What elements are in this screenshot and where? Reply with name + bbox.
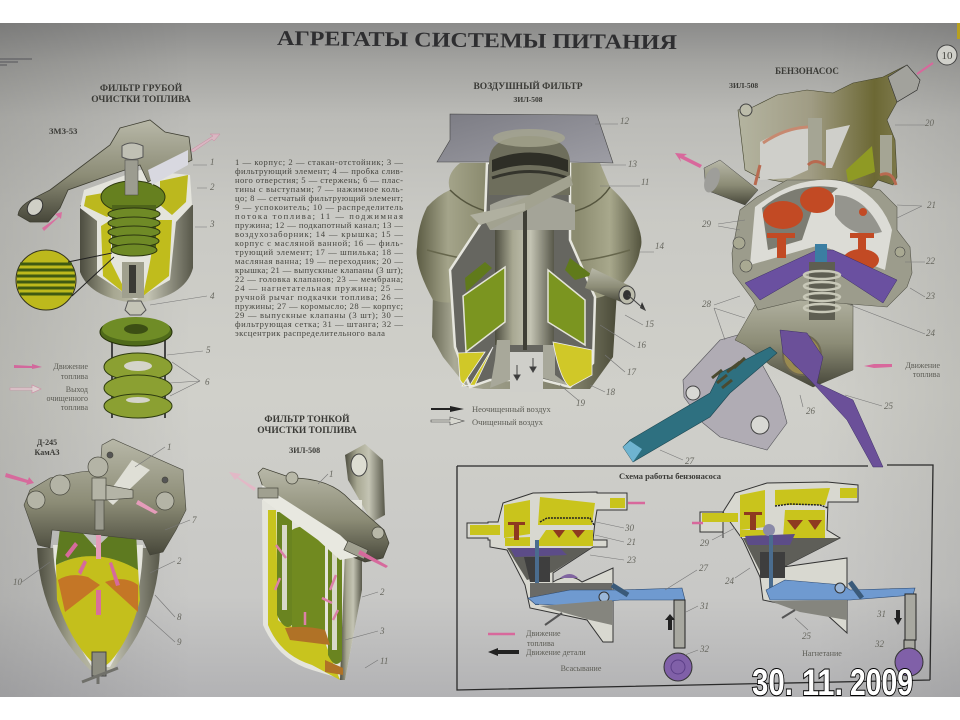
legend: fuel and part motion (488, 629, 586, 657)
part numbers: 4 (210, 291, 215, 301)
scheme part numbers: 24 (725, 576, 734, 586)
screws (733, 237, 905, 272)
part numbers: 20 (925, 118, 934, 128)
publisher imprint (0, 59, 32, 65)
panel: pump operation scheme (457, 465, 933, 690)
scheme part numbers: 30 (624, 523, 634, 533)
part numbers: 28 (702, 299, 712, 309)
parts list text: крышка; 21 — выпускные клапаны (3 шт); (235, 265, 403, 275)
caption: discharge: Нагнетание (802, 649, 842, 658)
part numbers: 12 (620, 116, 630, 126)
part numbers: 23 (926, 291, 936, 301)
parts list text: 1 — корпус; 2 — стакан-отстойник; 3 — (235, 157, 403, 167)
flow arrows (42, 134, 220, 231)
scheme heading: Схема работы бензонасоса (619, 471, 722, 481)
disk stack exploded view (100, 317, 211, 418)
outlet fitting (701, 160, 758, 205)
legend: fuel flow: топлива (913, 370, 940, 379)
legend: fuel flow (10, 362, 88, 412)
drain plug (82, 652, 118, 684)
part numbers (209, 157, 215, 301)
fuel flow arrows (628, 503, 703, 523)
part numbers: 2 (210, 182, 215, 192)
scheme part numbers (624, 523, 886, 654)
model label: Д-245 (37, 438, 57, 447)
bolts and fittings (27, 452, 174, 530)
parts list text: потока топлива; 11 — поджимная (235, 211, 403, 221)
base plate (683, 333, 787, 450)
legend: raw air (431, 404, 552, 414)
red valves (763, 187, 879, 271)
model label ZIL-508: ЗИЛ-508 (289, 446, 320, 455)
parts list text: трующий элемент; 17 — шпилька; 18 — (235, 247, 403, 257)
scheme part numbers: 21 (627, 537, 636, 547)
part numbers: 16 (637, 340, 646, 350)
legend: fuel flow: Движение (905, 361, 940, 370)
heading: air filter: ВОЗДУШНЫЙ ФИЛЬТР (473, 80, 583, 92)
caption: suction: Всасывание (561, 664, 602, 673)
central tube (470, 175, 575, 350)
cover (258, 468, 389, 562)
heading: fuel pump: БЕНЗОНАСОС (775, 66, 839, 76)
outer housing (417, 163, 641, 389)
model label: КамАЗ (35, 448, 59, 457)
panel: air filter (417, 80, 664, 427)
part numbers: 22 (926, 256, 936, 266)
date stamp: 2009 (850, 662, 913, 703)
yellow corner mark (957, 23, 960, 39)
bowl (37, 528, 160, 670)
purple membrane (745, 250, 897, 303)
parts list text: корпус с масляной ванной; 16 — филь- (235, 238, 403, 248)
model label: ЗИЛ-508 (729, 81, 758, 90)
bolt (122, 143, 143, 195)
part numbers: 24 (926, 328, 936, 338)
heading: fine filter: ФИЛЬТР ТОНКОЙ (264, 413, 350, 425)
outlet pipe (585, 268, 635, 304)
heading: coarse filter: ОЧИСТКИ ТОПЛИВА (91, 95, 191, 105)
poster number badge (937, 45, 957, 65)
legend: clean air: Очищенный воздух (472, 417, 544, 427)
parts list text (235, 157, 403, 338)
parts list text: масляная ванна; 19 — переходник; 20 — (235, 256, 403, 266)
model label: ЗИЛ-508 (513, 95, 543, 104)
part numbers: 1 (329, 469, 334, 479)
part numbers: 13 (628, 159, 638, 169)
panel: diesel filter D-245 KamAZ: 2 (177, 556, 182, 566)
air arrows (514, 295, 646, 380)
parts list text: 22 — головка клапанов; 23 — мембрана; (235, 274, 403, 284)
parts list text: 24 — нагнетательная пружина; 25 — (235, 283, 403, 293)
base holes (686, 386, 769, 434)
legend: fuel flow: очищенного (47, 394, 88, 403)
poster number badge: 10 (942, 50, 953, 62)
parts list text: пружины; 27 — коромысло; 28 — корпус; (235, 301, 403, 311)
parts list text: воздухозаборник; 14 — крышка; 15 — (235, 229, 403, 239)
panel: diesel filter D-245 KamAZ: 7 (192, 515, 197, 525)
part numbers (576, 116, 664, 408)
central stem (815, 244, 827, 262)
filter elements (463, 267, 585, 352)
coil spring on lever (783, 335, 821, 375)
panel: diesel filter D-245 KamAZ: 10 (13, 577, 22, 587)
part numbers: 11 (641, 177, 649, 187)
part numbers: 27 (685, 456, 694, 466)
parts list text: фильтрующая сетка; 31 — штанга; 32 — (235, 319, 403, 329)
legend: raw air: Неочищенный воздух (472, 404, 552, 414)
date stamp: 30. (752, 662, 793, 703)
scheme frame (457, 465, 933, 690)
bracket (18, 120, 192, 222)
part numbers: 29 (702, 219, 712, 229)
parts list text: 9 — успокоитель; 10 — распределитель (235, 202, 403, 212)
parts list text: 29 — выпускные клапаны (3 шт); 30 — (235, 310, 403, 320)
legend: clean air (431, 417, 544, 427)
bolts (258, 472, 384, 559)
panel: coarse fuel filter (16, 82, 220, 315)
date stamp (752, 662, 913, 703)
part numbers: 1 (167, 442, 172, 452)
lower body (735, 290, 853, 387)
coil on rocker (712, 358, 745, 388)
panel: fine fuel filter: 2 (380, 587, 385, 597)
parts list text: ручной рычаг подкачки топлива; 26 — (235, 292, 403, 302)
parts list text: эксцентрик распределительного вала (235, 328, 385, 338)
parts list text: фильтрующий элемент; 4 — пробка слив- (235, 166, 403, 176)
heading: coarse filter: ФИЛЬТР ГРУБОЙ (100, 82, 183, 94)
pump valve body (732, 180, 912, 310)
scheme part numbers: 27 (699, 563, 708, 573)
legend: fuel and part motion: Движение (526, 629, 561, 638)
intake plate (437, 114, 613, 163)
part numbers: 18 (606, 387, 616, 397)
part numbers: 17 (627, 367, 636, 377)
open bottom gap (510, 352, 543, 392)
part numbers: 3 (209, 219, 215, 229)
heading: fine filter: ОЧИСТКИ ТОПЛИВА (257, 426, 357, 436)
legend: fuel flow: Движение (53, 362, 88, 371)
mounting head (24, 439, 186, 555)
part numbers: 26 (806, 406, 816, 416)
flow arrows (675, 63, 933, 168)
parts list text: цо; 8 — сетчатый фильтрующий элемент; (235, 193, 403, 203)
filter cup (262, 500, 362, 680)
mounting lug (345, 444, 385, 522)
scheme part numbers: 25 (802, 631, 812, 641)
panel: fine fuel filter: 3 (379, 626, 385, 636)
throat (489, 129, 570, 195)
part numbers: 19 (576, 398, 586, 408)
parts list text: ного отверстия; 5 — стержень; 6 — плас- (235, 175, 403, 185)
filter element spring stack (101, 181, 165, 256)
legend: fuel flow: топлива (61, 403, 88, 412)
scheme part numbers: 23 (627, 555, 636, 565)
flow arrows (229, 472, 388, 625)
legend: fuel flow: Выход (66, 385, 88, 394)
panel: fine fuel filter (229, 413, 389, 680)
part numbers: 21 (927, 200, 936, 210)
magnified filter mesh (16, 250, 114, 310)
legend: fuel and part motion: Движение детали (526, 648, 586, 657)
parts list text: пружина; 12 — подкапотный канал; 13 — (235, 220, 403, 230)
cutaway interior (450, 163, 595, 387)
model label ZMZ-53: ЗМЗ-53 (49, 126, 77, 136)
scheme part numbers: 32 (874, 639, 884, 649)
purple hand lever (780, 330, 883, 467)
scheme part numbers: 31 (699, 601, 709, 611)
bottom adapter (490, 340, 570, 388)
part numbers: 1 (210, 157, 214, 167)
motion arrows (665, 610, 902, 630)
panel: diesel filter D-245 KamAZ: 9 (177, 637, 182, 647)
panel: diesel filter D-245 KamAZ (5, 438, 197, 684)
part numbers: 25 (884, 401, 894, 411)
disk stack exploded view: 6 (205, 377, 210, 387)
disk stack exploded view: 5 (206, 345, 211, 355)
spring (804, 262, 840, 320)
legend: fuel flow: топлива (61, 372, 88, 381)
oil bath (458, 342, 592, 387)
panel: fuel pump (623, 63, 940, 467)
panel: fine fuel filter: 11 (380, 656, 388, 666)
legend: fuel and part motion: топлива (527, 639, 555, 648)
title: АГРЕГАТЫ СИСТЕМЫ ПИТАНИЯ (277, 26, 677, 54)
scheme part numbers: 29 (700, 538, 710, 548)
right pump: discharge (700, 482, 923, 676)
part numbers (685, 118, 936, 466)
scheme part numbers: 31 (876, 609, 886, 619)
date stamp: 11. (802, 662, 843, 703)
legend: fuel flow (864, 361, 940, 379)
pump cover (738, 65, 920, 190)
part numbers: 14 (655, 241, 664, 251)
scheme part numbers: 32 (699, 644, 710, 654)
filter body (80, 170, 193, 315)
left pump: suction (467, 492, 692, 681)
blue rocker arm (623, 347, 777, 462)
parts list text: тины с выступами; 7 — нажимное коль- (235, 184, 403, 194)
part numbers: 15 (645, 319, 654, 329)
panel: diesel filter D-245 KamAZ: 8 (177, 612, 182, 622)
flow arrows (5, 473, 158, 615)
